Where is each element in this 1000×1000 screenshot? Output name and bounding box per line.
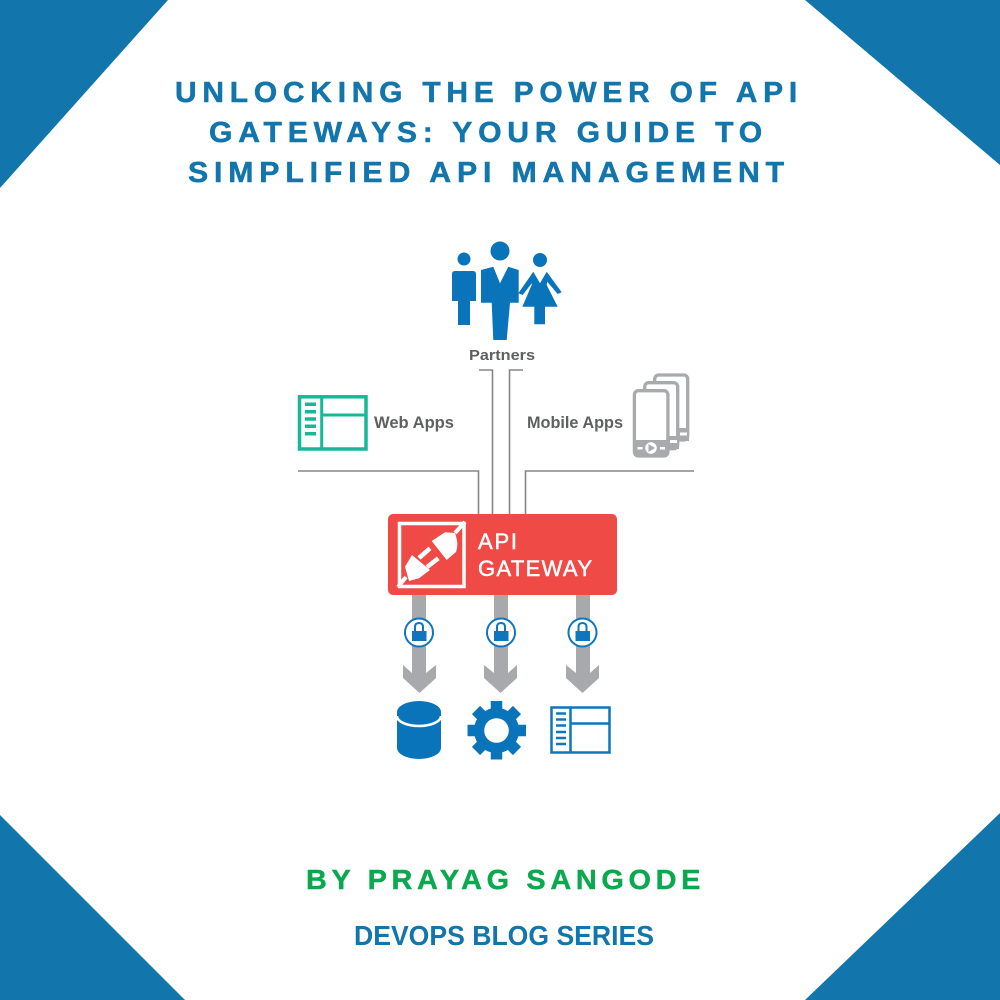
- icon: mobile apps: [634, 375, 689, 456]
- icon: web apps: [300, 396, 366, 450]
- title: GATEWAYS: YOUR GUIDE TO: [209, 117, 768, 149]
- icon: partners: [452, 242, 562, 340]
- label: partners: Partners: [469, 347, 535, 364]
- icon: gear: [468, 701, 526, 760]
- author line: BY PRAYAG SANGODE: [306, 864, 705, 895]
- icon: locks: [405, 618, 596, 646]
- title: UNLOCKING THE POWER OF API: [175, 77, 803, 109]
- panel: api gateway: [388, 514, 617, 595]
- connector lines: [298, 370, 694, 515]
- icon: plug: [398, 522, 465, 587]
- icon: database: [397, 701, 441, 759]
- panel: api gateway: GATEWAY: [478, 556, 592, 581]
- title: SIMPLIFIED API MANAGEMENT: [188, 157, 790, 189]
- panel: api gateway: API: [478, 529, 517, 554]
- series line: DEVOPS BLOG SERIES: [354, 920, 654, 951]
- gateway arrows: [403, 595, 599, 693]
- label: mobile apps: Mobile Apps: [527, 413, 623, 432]
- icon: service window: [552, 707, 610, 753]
- label: web apps: Web Apps: [374, 413, 454, 432]
- title: [175, 77, 803, 189]
